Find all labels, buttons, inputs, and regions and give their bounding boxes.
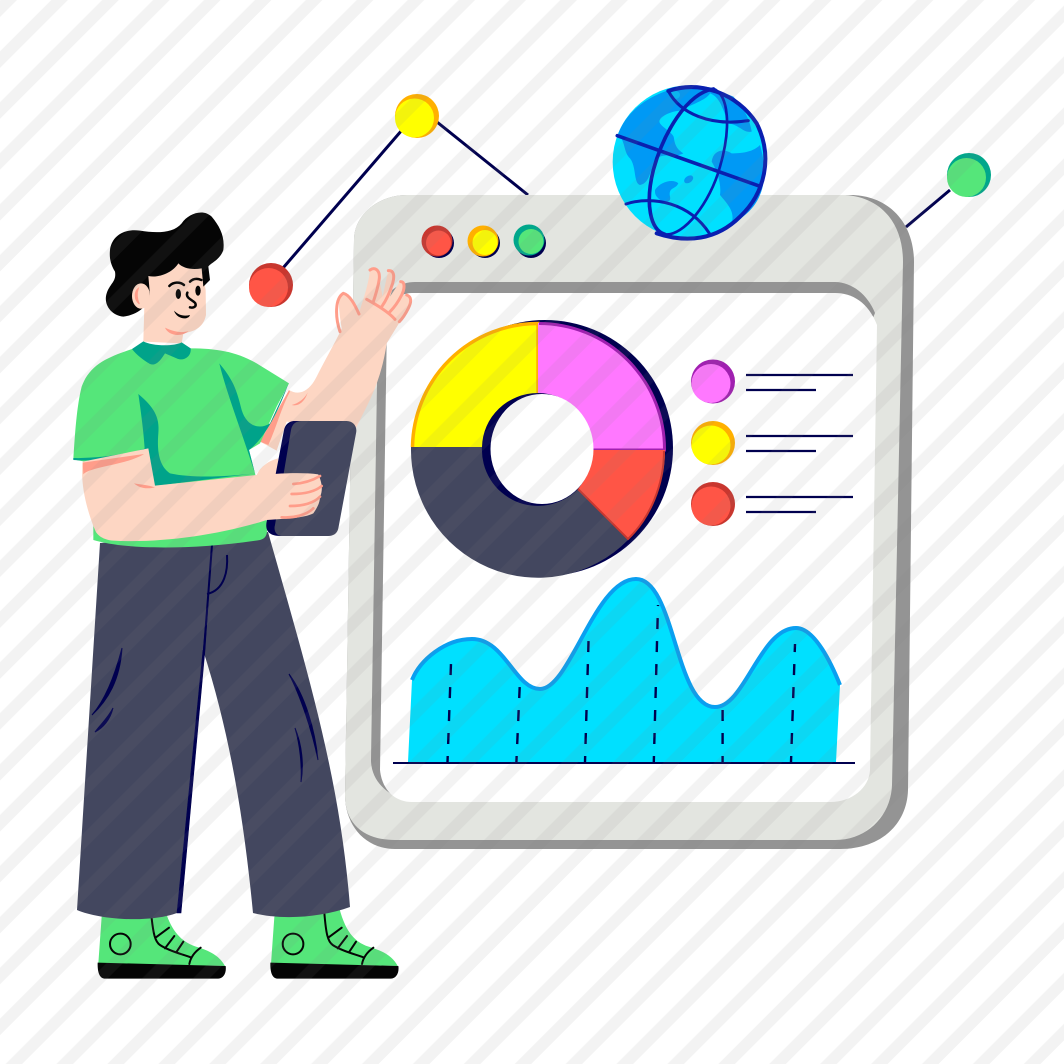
legend item: pink: [691, 360, 853, 404]
tablet: [257, 421, 356, 536]
legend: [691, 360, 853, 526]
window control dots: [422, 224, 546, 258]
raised arm: [260, 269, 411, 451]
right shoe: [270, 908, 399, 979]
trousers: [77, 532, 350, 919]
donut chart: [411, 320, 673, 578]
upper body: [73, 212, 411, 547]
donut hole: [490, 394, 594, 504]
area chart: [393, 579, 855, 763]
panel: browser window: [345, 195, 914, 849]
shirt: [73, 348, 289, 547]
character: man: [73, 212, 411, 979]
icon: green node: [947, 153, 991, 197]
head: [106, 212, 224, 365]
legend item: yellow: [691, 421, 853, 465]
donut segment: red: [578, 450, 665, 540]
icon: red node: [249, 263, 293, 307]
donut segment: yellow edge: [412, 324, 538, 447]
icon: yellow node: [395, 94, 439, 138]
donut segment: pink edge: [539, 324, 665, 450]
left shoe: [98, 915, 226, 979]
donut segment: yellow: [411, 322, 538, 447]
donut segment: pink: [538, 323, 665, 449]
icon: globe: [613, 85, 766, 239]
donut segment: dark: [411, 447, 628, 578]
holding arm: [82, 448, 322, 541]
connector lines: [283, 122, 950, 268]
donut segment: red edge: [578, 451, 664, 539]
legend item: red: [691, 482, 853, 526]
